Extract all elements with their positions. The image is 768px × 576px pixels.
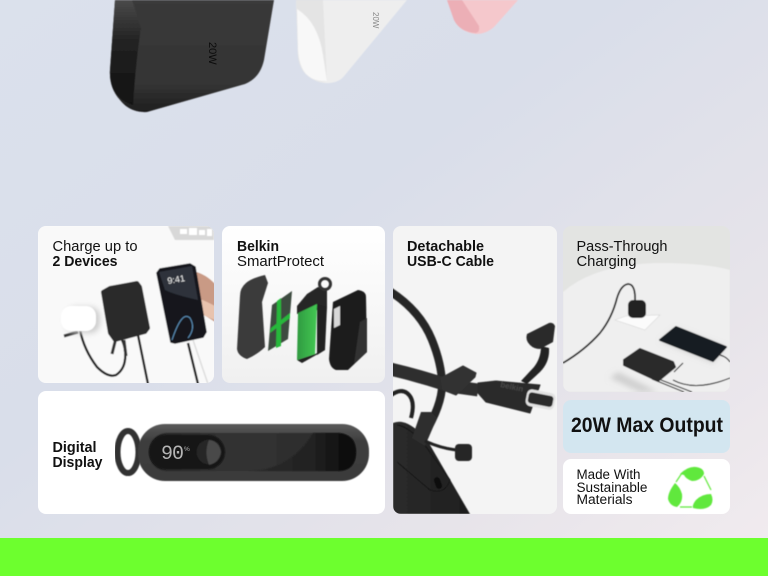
- curved reflection: [244, 433, 356, 471]
- heading: Digital: [52, 439, 96, 456]
- readout: 90: [161, 443, 183, 466]
- panel: pass-through charging: Charging: [576, 253, 636, 270]
- icon: recycle leaves: [668, 467, 712, 509]
- icon: earbuds case: [61, 306, 100, 333]
- panel: 20w max output: 20W Max Output: [571, 414, 723, 437]
- charging cables: [652, 355, 730, 392]
- text block: Sustainable: [576, 480, 648, 495]
- text block: [576, 467, 648, 507]
- heading: Charge up to: [52, 238, 138, 255]
- exploded view: circuit board: [268, 291, 292, 351]
- pink power bank: [447, 0, 518, 34]
- panel: belkin smartprotect: SmartProtect: [237, 253, 325, 270]
- panel: digital display: [38, 391, 385, 514]
- plate: [615, 315, 660, 330]
- capacity label: black: 20W: [206, 42, 218, 65]
- device body: [138, 424, 369, 481]
- capacity label: white: 20W: [371, 12, 380, 29]
- exploded view: battery: [297, 278, 330, 363]
- phone: [660, 327, 726, 363]
- panel: charge up to 2 devices: 2 Devices: [52, 253, 118, 270]
- panel: 20w max output: [563, 400, 730, 453]
- text block: Materials: [576, 492, 633, 507]
- table surface: [563, 263, 730, 392]
- cable cap tether: [521, 346, 549, 384]
- panel: detachable usb-c cable: [388, 226, 557, 514]
- heading: Pass-Through: [576, 238, 668, 255]
- small cap: [455, 444, 472, 461]
- panel: detachable usb-c cable: USB-C Cable: [407, 253, 494, 270]
- panel: pass-through charging: [563, 226, 730, 392]
- cable strain relief: [414, 411, 434, 446]
- percent sign: %: [184, 446, 190, 453]
- icon: loop: [118, 431, 138, 473]
- cable curving: [388, 290, 442, 435]
- braided cable: [390, 369, 478, 390]
- power bank: [624, 349, 675, 381]
- exploded view: left shell: [237, 275, 268, 359]
- icon: hand: [196, 272, 214, 322]
- black power bank: [110, 0, 274, 112]
- clip: [441, 366, 476, 395]
- small tether: [425, 441, 456, 450]
- cables: [80, 330, 198, 384]
- small cable loop: [390, 391, 413, 418]
- connector tip: [525, 388, 556, 411]
- cap: [526, 323, 555, 349]
- green footer band: [0, 538, 768, 576]
- device inset: [149, 433, 356, 471]
- icon: power bank: [103, 283, 148, 340]
- exploded view: right shell: [329, 290, 367, 370]
- panel: digital display: Display: [52, 454, 103, 471]
- panel: charge up to 2 devices: [38, 226, 215, 384]
- panel: sustainable materials: [563, 459, 730, 514]
- connector body: [478, 381, 540, 413]
- icon: phone: [157, 264, 206, 343]
- charger: [628, 300, 646, 318]
- connector logo: belkin: [500, 380, 524, 394]
- button: [196, 440, 222, 465]
- white power bank: [296, 0, 407, 83]
- bank shadow: [610, 372, 658, 392]
- charger cable: [563, 284, 635, 363]
- heading: Detachable: [407, 238, 484, 255]
- panel: charge up to 2 devices: 9:41: [167, 273, 186, 286]
- heading: Belkin: [237, 238, 279, 255]
- display pill: [149, 435, 225, 469]
- battery port: [434, 477, 442, 489]
- panel: belkin smartprotect: [222, 226, 385, 383]
- text block: Made With: [576, 467, 640, 482]
- battery: [393, 422, 470, 514]
